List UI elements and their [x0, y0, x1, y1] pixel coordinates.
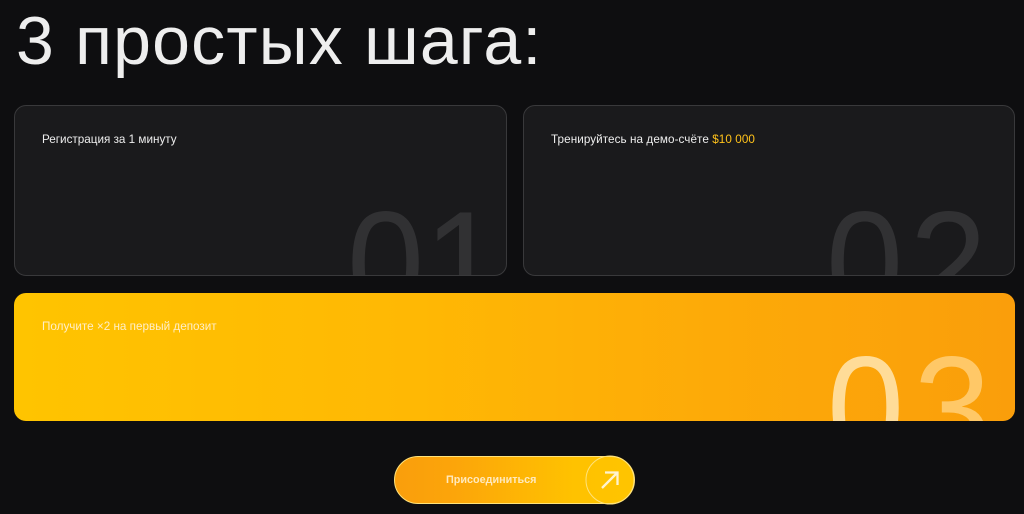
icon: arrow in circle: [586, 456, 634, 504]
panel: step 3: [14, 293, 1015, 421]
panel: step 2: [523, 105, 1015, 276]
step 2 text: Тренируйтесь на демо-счёте $10 000: [551, 133, 755, 146]
panel: step 1: [14, 105, 507, 276]
step 3 text: Получите ×2 на первый депозит: [42, 320, 217, 333]
step 1 text: Регистрация за 1 минуту: [42, 133, 177, 146]
button label: Присоединиться: [446, 474, 536, 486]
button: join: [394, 456, 635, 504]
title: 3 простых шага:: [16, 3, 542, 79]
